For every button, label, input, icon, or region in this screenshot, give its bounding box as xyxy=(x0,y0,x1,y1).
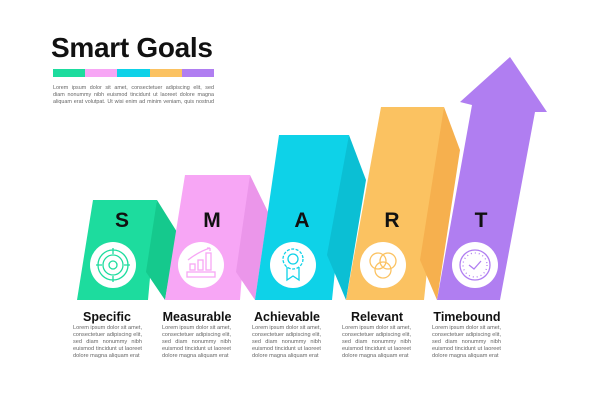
segment: cyan xyxy=(255,135,366,300)
text: Measurable xyxy=(163,310,231,324)
intro text: aliquam erat volutpat. Ut wisi enim ad minim veniam, quis nostrud xyxy=(53,99,214,105)
segment: orange xyxy=(346,107,460,300)
letters: S xyxy=(115,209,129,232)
letters: A xyxy=(294,209,310,232)
text: Relevant xyxy=(351,310,403,324)
icon: chart xyxy=(178,242,224,288)
column: Measurable xyxy=(162,310,231,359)
icon: venn xyxy=(360,242,406,288)
icon: clock xyxy=(452,242,498,288)
letters: M xyxy=(203,209,221,232)
segment: pink xyxy=(165,175,268,300)
segment: green xyxy=(77,200,177,300)
column: Timebound xyxy=(432,310,501,359)
column: Achievable xyxy=(252,310,321,359)
letters: R xyxy=(384,209,400,232)
icon: award xyxy=(270,242,316,288)
letters xyxy=(115,209,488,232)
title: Smart Goals xyxy=(51,32,213,63)
column: Specific xyxy=(73,310,142,359)
letters: T xyxy=(475,209,488,232)
text: Lorem ipsum dolor sit amet, consectetuer adipiscing elit, sed diam nonummy nibh euismod tincidunt ut laoreet dolore magna aliquam erat xyxy=(73,325,142,359)
text: Specific xyxy=(83,310,131,324)
column: Relevant xyxy=(342,310,411,359)
text: Lorem ipsum dolor sit amet, consectetuer adipiscing elit, sed diam nonummy nibh euismod tincidunt ut laoreet dolore magna aliquam erat xyxy=(162,325,231,359)
text: Timebound xyxy=(433,310,501,324)
arrow: purple xyxy=(437,57,547,300)
color bar xyxy=(53,69,214,77)
text: Lorem ipsum dolor sit amet, consectetuer adipiscing elit, sed diam nonummy nibh euismod tincidunt ut laoreet dolore magna aliquam erat xyxy=(432,325,501,359)
text: Lorem ipsum dolor sit amet, consectetuer adipiscing elit, sed diam nonummy nibh euismod tincidunt ut laoreet dolore magna aliquam erat xyxy=(252,325,321,359)
intro text xyxy=(53,85,214,105)
text: Lorem ipsum dolor sit amet, consectetuer adipiscing elit, sed diam nonummy nibh euismod tincidunt ut laoreet dolore magna aliquam erat xyxy=(342,325,411,359)
intro text: diam nonummy nibh euismod tincidunt ut laoreet dolore magna xyxy=(53,92,214,98)
intro text: Lorem ipsum dolor sit amet, consectetuer adipiscing elit, sed xyxy=(53,85,214,91)
icon: target xyxy=(90,242,136,288)
text: Achievable xyxy=(254,310,320,324)
